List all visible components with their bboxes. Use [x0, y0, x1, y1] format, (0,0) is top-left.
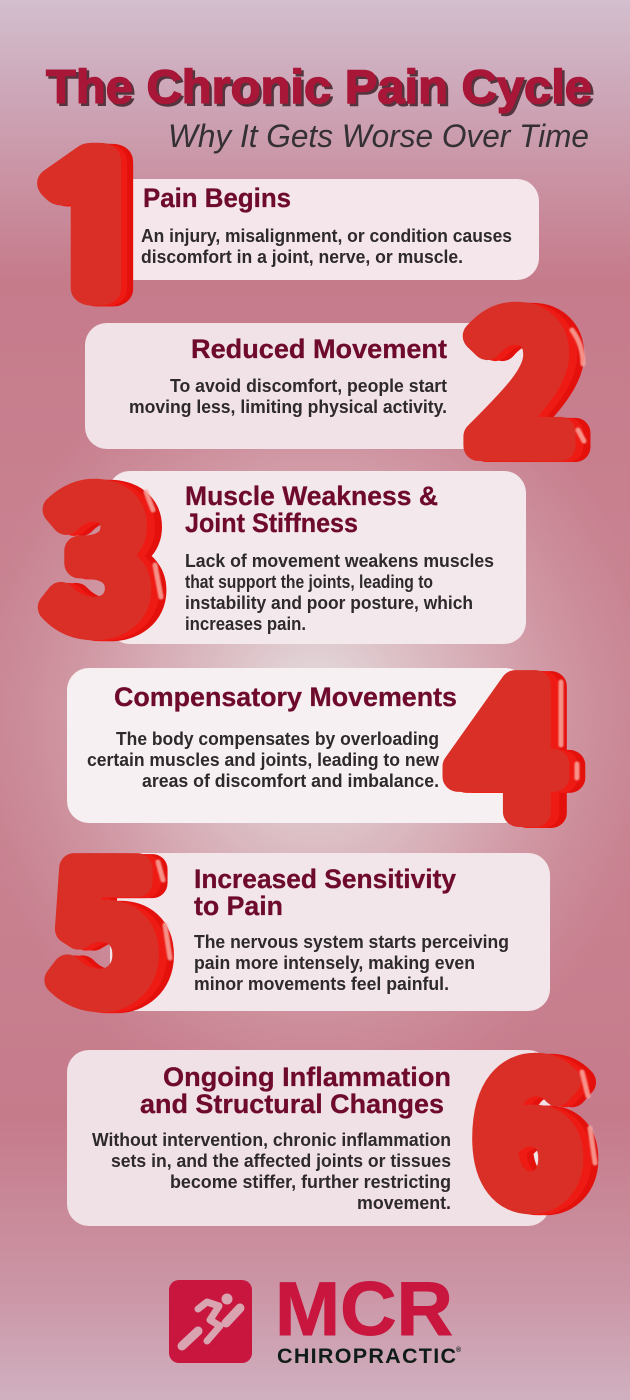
- text: step 3 description: [185, 550, 494, 634]
- text: step 1 description: discomfort in a joint, nerve, or muscle.: [141, 246, 463, 267]
- subtitle: Why It Gets Worse Over Time: [168, 118, 589, 154]
- text: step 4 description: certain muscles and joints, leading to new: [87, 749, 440, 770]
- numeral 3: 3: [63, 419, 161, 676]
- logo: mcr chiropractic: [169, 1267, 462, 1368]
- numeral 5: 5: [63, 791, 161, 1048]
- text: step 1 description: [141, 225, 512, 267]
- numeral 4: 4: [463, 606, 568, 864]
- numeral 1: 1: [25, 138, 154, 316]
- text: step 2 description: [129, 375, 447, 417]
- numeral 2: 2: [471, 241, 569, 498]
- heading: compensatory movements: Compensatory Movements: [114, 682, 457, 712]
- heading: ongoing inflammation and structural changes: Ongoing Inflammation: [163, 1062, 451, 1092]
- text: step 6 description: Without intervention, chronic inflammation: [92, 1129, 451, 1150]
- text: step 4 description: The body compensates by overloading: [116, 728, 439, 749]
- text: step 3 description: instability and poor posture, which: [185, 592, 473, 613]
- numeral 1: 1: [31, 139, 160, 317]
- panel: step 4 compensatory movements: [67, 668, 527, 823]
- heading: increased sensitivity to pain: to Pain: [194, 891, 283, 921]
- title: The Chronic Pain Cycle: [48, 62, 594, 116]
- numeral 6: 6: [493, 993, 591, 1250]
- numeral 1: 1: [37, 139, 166, 317]
- panel: step 3 muscle weakness: [108, 471, 526, 644]
- title: The Chronic Pain Cycle: [46, 60, 592, 113]
- text: step 2 description: moving less, limiting physical activity.: [129, 396, 447, 417]
- text: step 5 description: The nervous system starts perceiving: [194, 931, 509, 952]
- wordmark: chiropractic: CHIROPRACTIC: [277, 1344, 456, 1368]
- wordmark: mcr: MCR: [275, 1267, 453, 1352]
- panel: step 1 pain begins: [100, 179, 539, 280]
- numeral 2: 2: [486, 242, 584, 499]
- heading: muscle weakness and joint stiffness: [185, 481, 438, 538]
- text: step 3 description: Lack of movement weakens muscles: [185, 550, 494, 571]
- heading: reduced movement: Reduced Movement: [191, 334, 447, 364]
- heading: ongoing inflammation and structural changes: [140, 1062, 451, 1119]
- numeral 3: 3: [48, 418, 146, 675]
- text: step 5 description: [194, 931, 509, 994]
- heading: muscle weakness and joint stiffness: Muscle Weakness &: [185, 481, 438, 511]
- text: step 6 description: movement.: [357, 1192, 451, 1213]
- icon: runner badge: [169, 1280, 252, 1363]
- panel: step 2 reduced movement: [85, 323, 527, 449]
- heading: increased sensitivity to pain: Increased Sensitivity: [194, 864, 456, 894]
- heading: muscle weakness and joint stiffness: Joint Stiffness: [185, 508, 358, 538]
- text: step 6 description: [92, 1129, 451, 1213]
- numeral 4: 4: [471, 606, 575, 864]
- panel: step 5 increased sensitivity: [110, 853, 550, 1011]
- panel: step 6 ongoing inflammation: [67, 1050, 550, 1226]
- numeral 5: 5: [70, 791, 168, 1048]
- numeral 4: 4: [455, 605, 559, 863]
- text: step 4 description: [87, 728, 440, 791]
- heading: ongoing inflammation and structural changes: and Structural Changes: [140, 1089, 444, 1119]
- text: step 6 description: sets in, and the affected joints or tissues: [111, 1150, 451, 1171]
- text: step 6 description: become stiffer, further restricting: [170, 1171, 451, 1192]
- numeral 3: 3: [56, 419, 154, 676]
- heading: increased sensitivity to pain: [194, 864, 456, 921]
- registered mark: ®: [456, 1346, 462, 1354]
- numeral 5: 5: [55, 790, 153, 1047]
- text: step 1 description: An injury, misalignment, or condition causes: [141, 225, 512, 246]
- text: step 2 description: To avoid discomfort, people start: [170, 375, 447, 396]
- numeral 2: 2: [479, 242, 577, 499]
- text: step 5 description: pain more intensely, making even: [194, 952, 475, 973]
- text: step 5 description: minor movements feel painful.: [194, 973, 449, 994]
- text: step 4 description: areas of discomfort and imbalance.: [142, 770, 439, 791]
- numeral 6: 6: [478, 992, 576, 1249]
- heading: pain begins: Pain Begins: [143, 183, 291, 213]
- text: step 3 description: increases pain.: [185, 613, 306, 634]
- text: step 3 description: that support the joints, leading to: [185, 571, 433, 592]
- numeral 6: 6: [486, 993, 584, 1250]
